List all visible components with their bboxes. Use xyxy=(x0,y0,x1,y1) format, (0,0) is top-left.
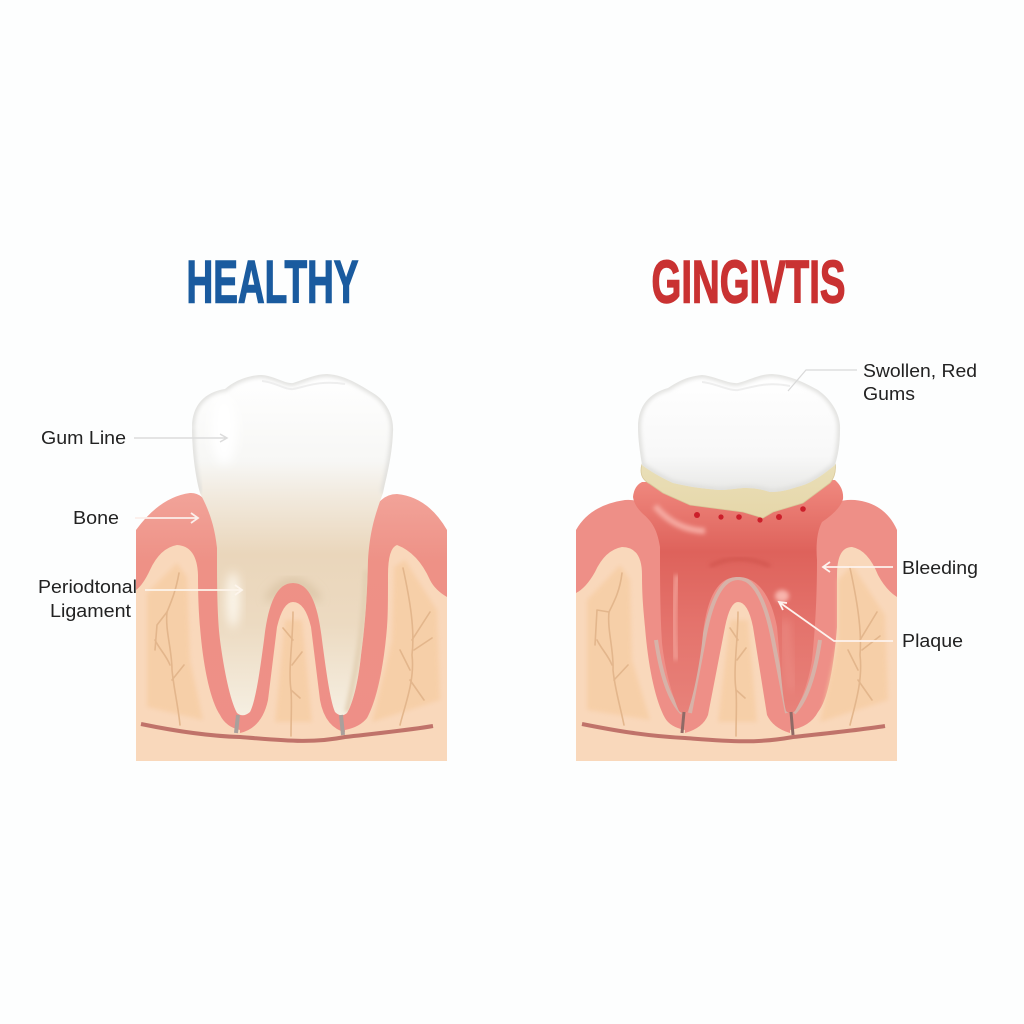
left bone xyxy=(576,547,685,761)
label: periodontal ligament: Periodtonal xyxy=(38,576,137,597)
ligament stubs xyxy=(236,715,343,735)
ligament stubs xyxy=(682,712,793,735)
arrow: bleeding xyxy=(823,562,893,572)
panel: healthy tooth illustration xyxy=(136,374,447,761)
bone darker marrow xyxy=(147,560,440,722)
title: gingivitis: GINGIVTIS xyxy=(652,248,846,316)
blood vessel xyxy=(141,724,433,741)
plaque band xyxy=(641,462,835,518)
label: bone: Bone xyxy=(73,507,119,528)
label: bleeding: Bleeding xyxy=(902,557,978,578)
bleeding dots xyxy=(694,506,806,523)
arrow: plaque xyxy=(779,602,893,641)
bone darker marrow xyxy=(587,565,888,722)
bone veins xyxy=(595,568,880,736)
gum highlights xyxy=(655,506,792,690)
middle bone and base strip xyxy=(685,602,790,761)
label: swollen red gums: Swollen, Red xyxy=(863,360,977,381)
tooth xyxy=(192,374,393,715)
arrow: periodontal ligament xyxy=(145,585,242,595)
label: plaque: Plaque xyxy=(902,630,963,651)
label: swollen red gums: Gums xyxy=(863,383,915,404)
label: periodontal ligament: Ligament xyxy=(50,600,131,621)
panel: gingivitis tooth illustration xyxy=(576,374,897,761)
inflamed red gum xyxy=(633,480,843,713)
plaque line xyxy=(656,578,820,713)
label: gum line: Gum Line xyxy=(41,427,126,448)
arrow: swollen red gums xyxy=(788,370,857,391)
bone veins xyxy=(155,568,432,736)
crown shading xyxy=(638,374,840,492)
blood vessel xyxy=(582,724,885,741)
arrow: gum line xyxy=(134,434,227,442)
title: healthy: HEALTHY xyxy=(186,248,358,316)
crown xyxy=(638,374,840,492)
middle bone and base strip xyxy=(240,602,347,761)
left bone xyxy=(136,545,240,761)
tooth shading xyxy=(192,374,393,712)
right bone xyxy=(790,547,897,761)
gum tissue xyxy=(576,500,897,740)
gum tissue xyxy=(136,493,447,740)
right bone xyxy=(345,545,447,761)
arrow: bone xyxy=(135,513,198,523)
